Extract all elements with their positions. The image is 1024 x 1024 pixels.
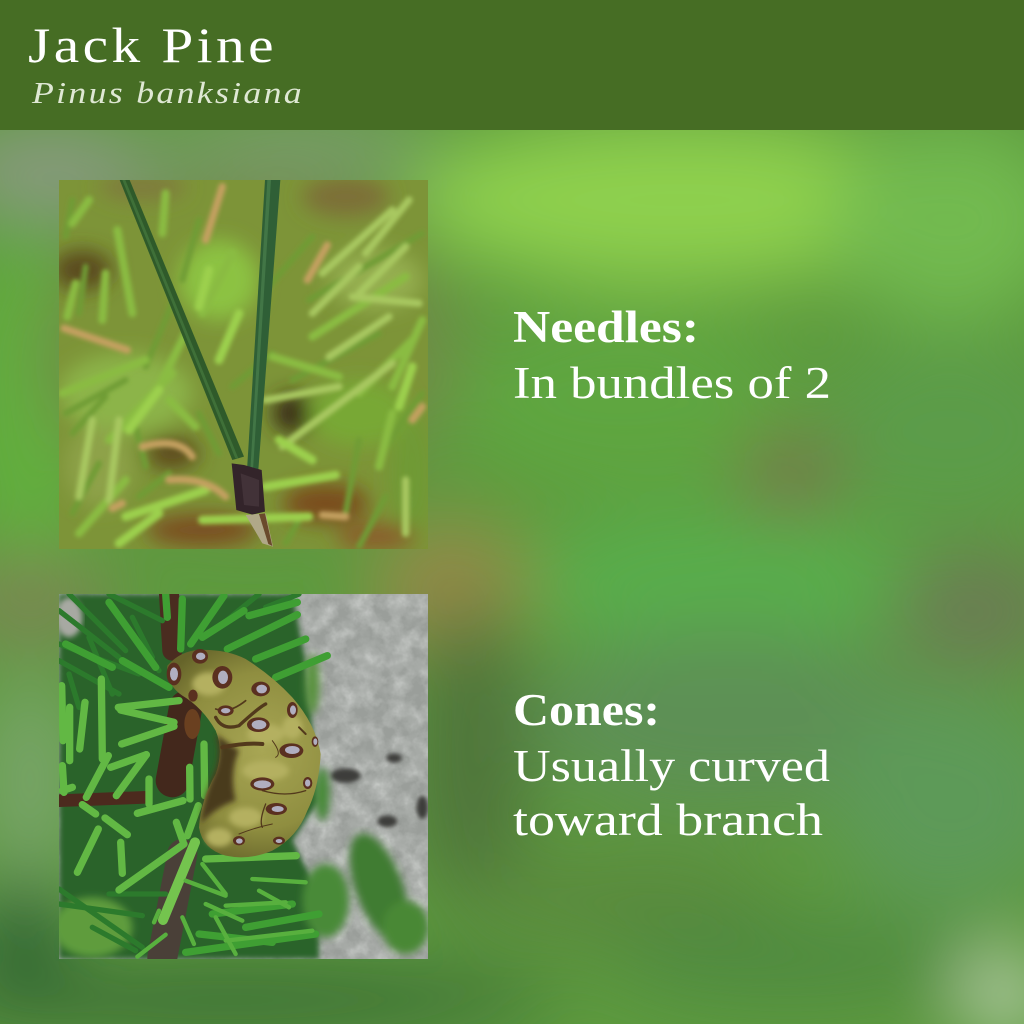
cone scale creases <box>216 701 306 834</box>
label: needles: In bundles of 2 <box>513 358 831 408</box>
label: cones: Cones: <box>513 685 660 735</box>
label: needles: Needles: <box>513 302 699 352</box>
pine needles: bright <box>62 679 296 890</box>
pine cone <box>167 649 321 857</box>
grey rock gap top left <box>56 597 82 637</box>
branch <box>59 594 186 957</box>
pine needles: mid <box>66 594 327 952</box>
title: Jack Pine <box>28 17 277 73</box>
foliage shadow <box>59 594 319 959</box>
photo: needles <box>52 173 436 550</box>
label: cones <box>513 685 830 845</box>
dark rock pits <box>331 753 428 827</box>
scales of branch base <box>184 709 200 739</box>
subtitle: Pinus banksiana <box>31 75 304 110</box>
moss bottom right <box>52 654 429 957</box>
granite texture <box>59 594 428 959</box>
header band <box>0 0 1024 130</box>
needle sheath <box>232 463 265 515</box>
grass blades <box>62 187 422 547</box>
out-of-focus ground <box>52 173 436 550</box>
right needle <box>247 180 280 470</box>
left needle <box>120 180 244 460</box>
dark inner shadow of cone <box>201 734 239 824</box>
label: cones: Usually curved <box>513 741 830 791</box>
cone scale shading <box>192 672 302 847</box>
pine needles: dark <box>59 594 299 951</box>
cone umbos <box>167 649 318 845</box>
photo: cones <box>52 594 429 959</box>
label: needles <box>513 302 831 408</box>
label: cones: toward branch <box>513 795 823 845</box>
